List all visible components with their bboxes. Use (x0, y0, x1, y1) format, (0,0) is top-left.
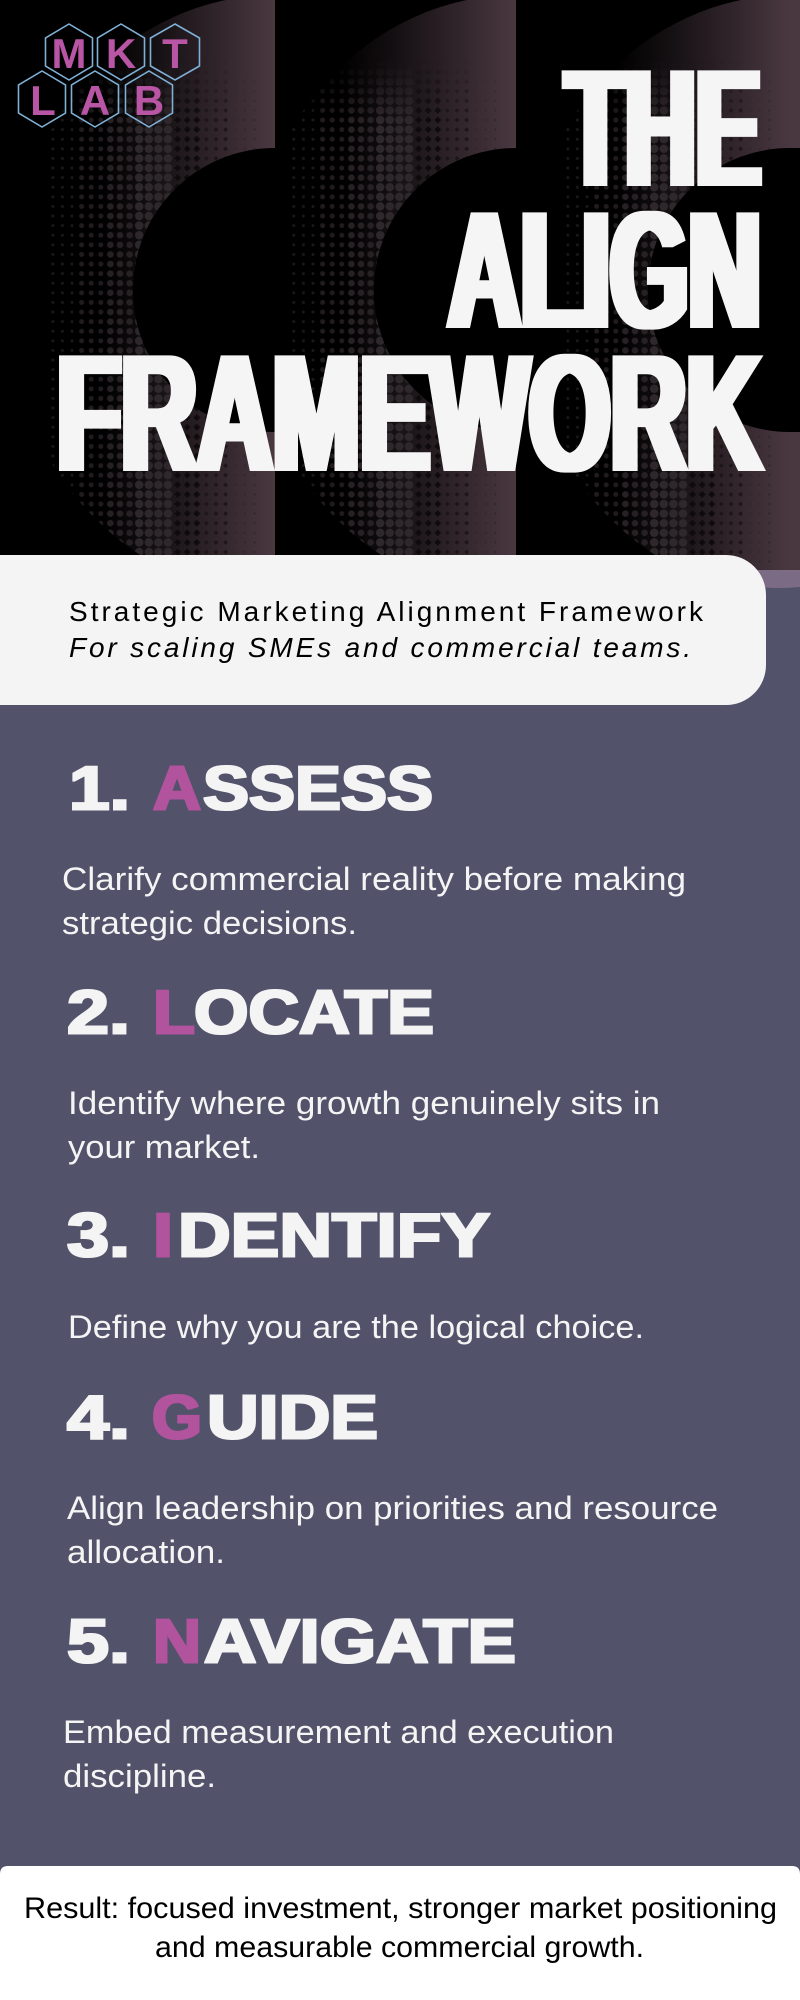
step 5: navigate: 5. (67, 1607, 130, 1676)
logo: MKT LAB hexagons: L (30, 77, 56, 124)
step 1: assess: A (153, 754, 201, 823)
step 2: locate: L (153, 978, 195, 1047)
step 2: locate: OCATE (194, 978, 434, 1047)
main content background (0, 570, 800, 2000)
step 4: guide: 4. (67, 1383, 130, 1452)
step 1: assess: Clarify commercial reality before making (62, 861, 686, 897)
step 1: assess (62, 754, 686, 941)
subtitle panel (0, 555, 766, 705)
step 4: guide: UIDE (207, 1383, 378, 1452)
step 5: navigate: discipline. (63, 1758, 216, 1794)
result footer: Result: focused investment, stronger market positioning (24, 1892, 777, 1925)
logo: MKT LAB hexagons: K (106, 30, 136, 77)
step 4: guide (67, 1383, 718, 1570)
step 4: guide: Align leadership on priorities and resource (67, 1490, 718, 1526)
decorative purple strip (740, 570, 800, 588)
step 4: guide: G (152, 1383, 202, 1452)
step 2: locate: Identify where growth genuinely sits in (68, 1085, 660, 1121)
step 1: assess: strategic decisions. (62, 905, 357, 941)
step 5: navigate: N (153, 1607, 201, 1676)
logo: MKT LAB hexagons: T (162, 30, 188, 77)
step 1: assess: SSESS (203, 754, 433, 823)
result footer (0, 1866, 800, 2000)
logo: MKT LAB hexagons: A (80, 77, 110, 124)
logo: MKT LAB hexagons: M (52, 30, 86, 77)
step 5: navigate: AVIGATE (204, 1607, 516, 1676)
step 2: locate (67, 978, 660, 1165)
step 4: guide: allocation. (67, 1534, 225, 1570)
step 3: identify (67, 1201, 644, 1345)
result footer: and measurable commercial growth. (155, 1931, 644, 1964)
step 5: navigate: Embed measurement and execution (63, 1714, 614, 1750)
step 2: locate: 2. (67, 978, 130, 1047)
step 1: assess: 1. (69, 754, 130, 823)
step 3: identify: Define why you are the logical choice. (68, 1309, 644, 1345)
step 3: identify: I (153, 1201, 173, 1270)
title (57, 34, 762, 507)
step 3: identify: 3. (67, 1201, 130, 1270)
header background with halftone arcs (0, 0, 800, 600)
step 2: locate: your market. (68, 1129, 260, 1165)
subtitle panel: Strategic Marketing Alignment Framework (69, 596, 704, 627)
logo: MKT LAB hexagons (18, 24, 200, 127)
step 5: navigate (63, 1607, 614, 1794)
step 3: identify: DENTIFY (178, 1201, 490, 1270)
logo: MKT LAB hexagons: B (134, 77, 164, 124)
subtitle panel: For scaling SMEs and commercial teams. (69, 632, 691, 663)
